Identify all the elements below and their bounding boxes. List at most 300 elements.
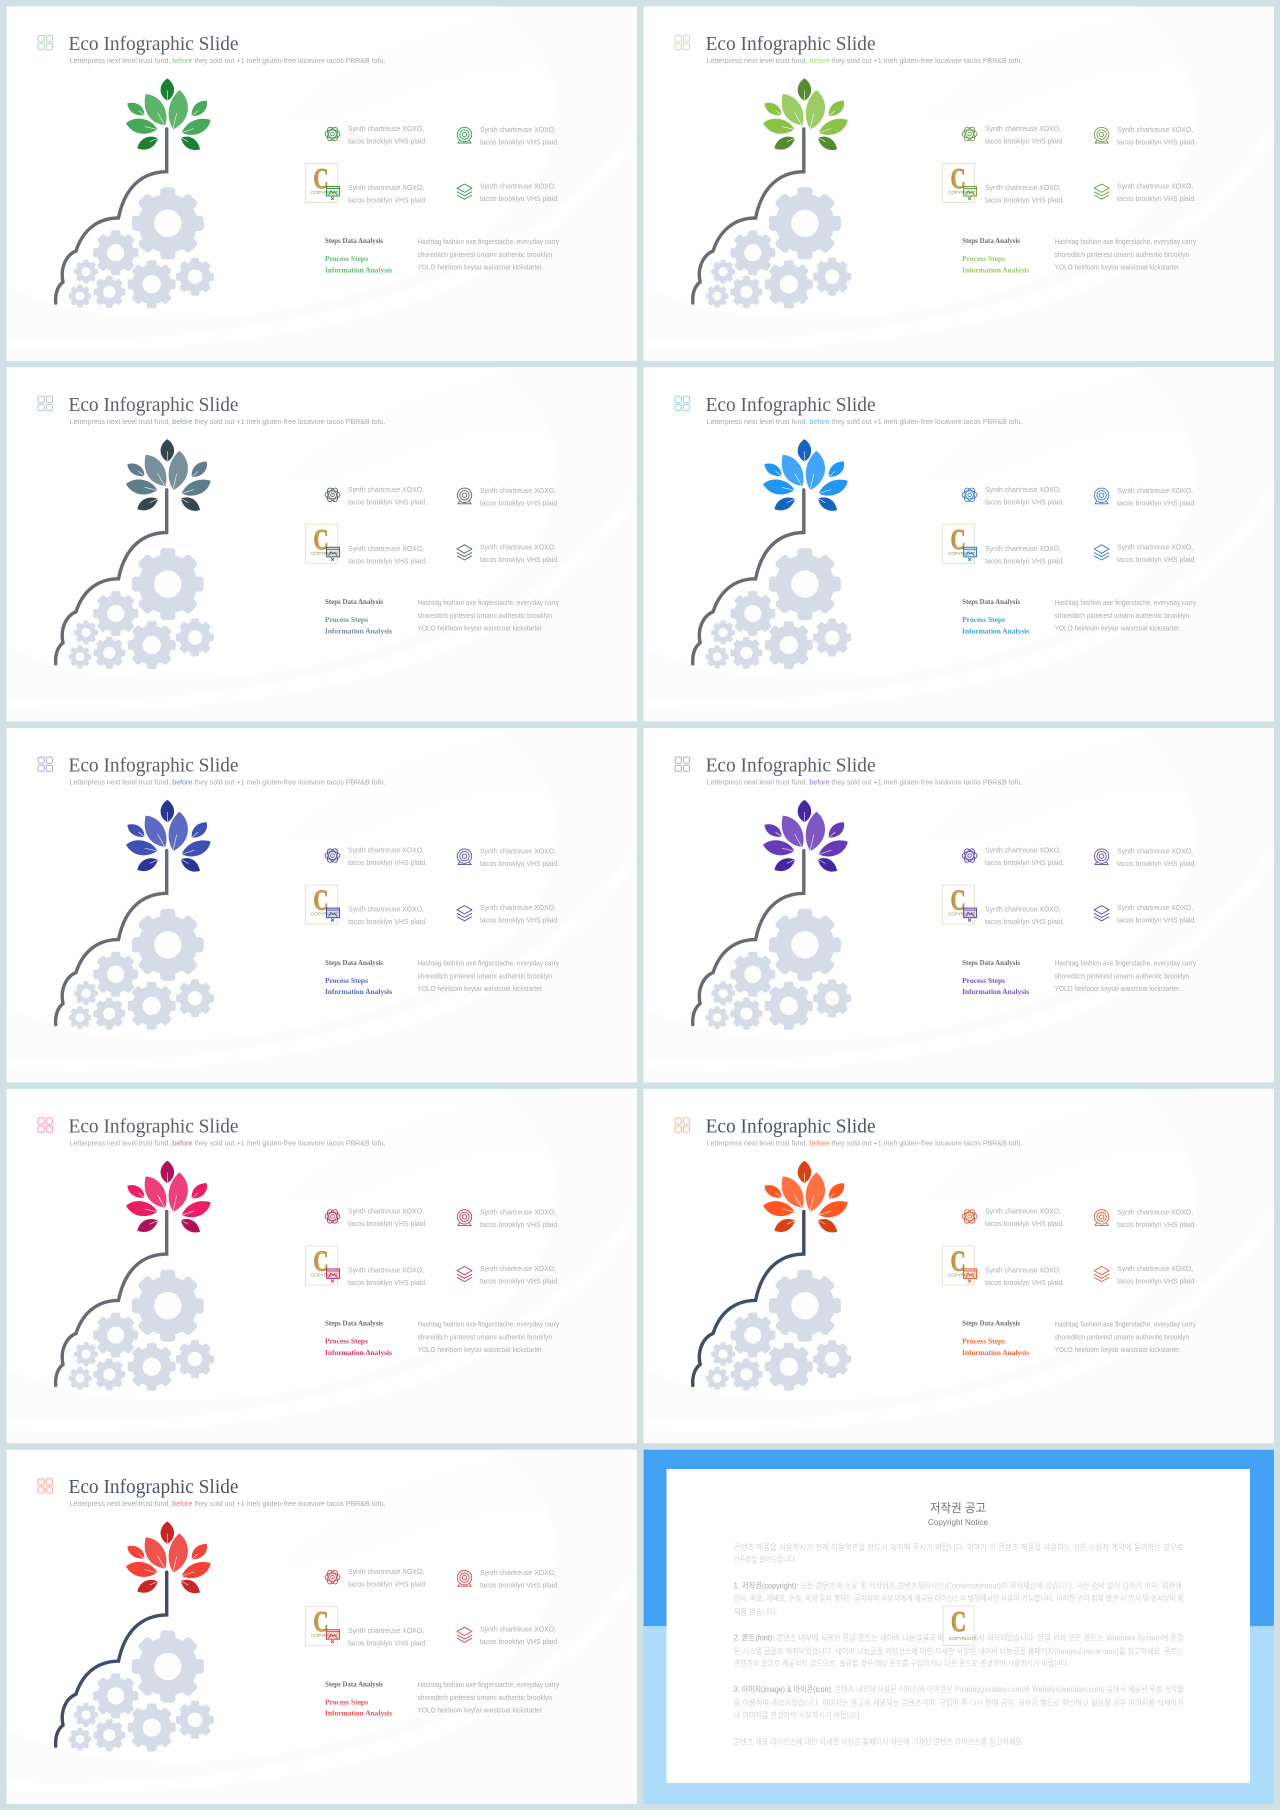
feature text 2: Synth chartreuse XOXO, xyxy=(480,125,556,134)
feature text 1: tacos brooklyn VHS plaid. xyxy=(348,1580,427,1589)
feature text 4: Synth chartreuse XOXO, xyxy=(480,182,556,190)
feature text 3: Synth chartreuse XOXO, xyxy=(348,544,424,553)
feature text 2: Synth chartreuse XOXO, xyxy=(1117,486,1193,495)
description paragraph: shoreditch pinterest umami authentic brooklyn xyxy=(418,972,552,981)
cloud outline and stem xyxy=(56,1572,167,1746)
steps labels: Information Analysis xyxy=(325,1348,392,1357)
steps labels: Steps Data Analysis xyxy=(325,598,383,606)
icon: atom xyxy=(325,126,340,142)
watermark thumbnail xyxy=(306,1607,340,1646)
gear cluster xyxy=(68,187,214,308)
steps labels xyxy=(962,598,1029,635)
clause 1 copyright xyxy=(734,1580,1184,1616)
title: Eco Infographic Slide xyxy=(706,395,876,416)
feature text 2 xyxy=(480,847,559,868)
steps labels: Steps Data Analysis xyxy=(962,959,1020,967)
feature text 3 xyxy=(985,905,1064,926)
title: Eco Infographic Slide xyxy=(68,34,238,55)
steps labels: Steps Data Analysis xyxy=(325,959,383,967)
icon: title squares xyxy=(675,757,690,771)
blue top band xyxy=(644,1450,1274,1626)
steps labels xyxy=(962,959,1029,996)
description paragraph: YOLO heirloom keytar waistcoat kickstarter. xyxy=(1055,623,1181,632)
clause 1 copyright: 전시, 배포, 재배포, 수정, 복제 등의 행위는 금지되며 사용자에게 제공된 라이선스의 범위에서만 사용이 가능합니다. 이러한 권리 침해 발견 시 민사 및 형사상의 제 xyxy=(734,1593,1184,1603)
icon: title squares xyxy=(675,396,690,411)
feature text 4: tacos brooklyn VHS plaid. xyxy=(1117,916,1196,925)
feature text 3: tacos brooklyn VHS plaid. xyxy=(348,556,427,565)
watermark thumbnail: C xyxy=(314,1607,328,1638)
description paragraph: shoreditch pinterest umami authentic brooklyn xyxy=(1055,972,1189,981)
feature text 3 xyxy=(985,544,1064,565)
feature text 2: tacos brooklyn VHS plaid. xyxy=(1117,498,1196,507)
watermark thumbnail: C xyxy=(951,1246,966,1277)
description paragraph xyxy=(418,1319,559,1354)
icon: atom xyxy=(962,126,977,142)
title: Eco Infographic Slide xyxy=(68,1116,238,1137)
watermark thumbnail xyxy=(943,1606,976,1646)
description paragraph: YOLO heirloom keytar waistcoat kickstarter. xyxy=(418,984,544,993)
feature text 1: Synth chartreuse XOXO, xyxy=(985,124,1061,133)
feature text 1: tacos brooklyn VHS plaid. xyxy=(985,136,1064,146)
icon: leaf crown xyxy=(126,800,211,872)
description paragraph: shoreditch pinterest umami authentic brooklyn xyxy=(418,1693,552,1702)
feature text 1: Synth chartreuse XOXO, xyxy=(348,846,424,855)
watermark thumbnail: C xyxy=(314,1246,328,1277)
feature text 4: Synth chartreuse XOXO, xyxy=(1117,182,1193,190)
subtitle: Letterpress next level trust fund, before they sold out +1 meh gluten-free locavore tacos PBR&B tofu. xyxy=(707,56,1023,65)
feature text 2: tacos brooklyn VHS plaid. xyxy=(480,1581,559,1590)
description paragraph: Hashtag fashion axe fingerstache, everyday carry xyxy=(1055,959,1197,968)
steps labels: Steps Data Analysis xyxy=(325,1320,383,1328)
feature text 4 xyxy=(480,542,559,564)
steps labels: Information Analysis xyxy=(962,1348,1029,1357)
watermark thumbnail xyxy=(306,885,340,924)
description paragraph: shoreditch pinterest umami authentic brooklyn xyxy=(1055,611,1189,620)
notice subtitle: Copyright Notice xyxy=(928,1518,989,1527)
cloud outline and stem xyxy=(56,490,167,664)
steps labels: Process Steps xyxy=(325,615,368,624)
steps labels: Information Analysis xyxy=(325,987,392,996)
clause 3 image and icon: 3. 이미지(image) & 아이콘(icon): 콘텐츠 내부에 사용된 이미지와 아이콘은 Pixabay(pixabay.com)와 Webalys(webalys.com) 등에서 제공된 무료 저작물 xyxy=(734,1684,1184,1694)
feature text 2: tacos brooklyn VHS plaid. xyxy=(480,1220,559,1229)
watermark thumbnail: COPYRIGHT xyxy=(311,1633,338,1638)
feature text 2 xyxy=(1117,486,1196,507)
panel: red slide xyxy=(6,1450,637,1804)
icon: leaf crown xyxy=(126,1522,211,1593)
feature text 3 xyxy=(985,1265,1064,1287)
feature text 2: Synth chartreuse XOXO, xyxy=(480,1207,556,1216)
feature text 2: Synth chartreuse XOXO, xyxy=(480,486,556,495)
feature text 3 xyxy=(348,183,427,204)
icon: target xyxy=(457,127,472,143)
watermark thumbnail xyxy=(943,1246,977,1285)
icon: target xyxy=(457,488,472,504)
subtitle: Letterpress next level trust fund, before they sold out +1 meh gluten-free locavore tacos PBR&B tofu. xyxy=(70,778,386,787)
subtitle: Letterpress next level trust fund, before they sold out +1 meh gluten-free locavore tacos PBR&B tofu. xyxy=(707,1138,1023,1147)
feature text 3 xyxy=(348,1265,427,1287)
panel: green slide xyxy=(6,6,637,361)
feature text 1: Synth chartreuse XOXO, xyxy=(348,124,424,133)
description paragraph: Hashtag fashion axe fingerstache, everyday carry xyxy=(418,1319,559,1328)
feature text 2 xyxy=(480,1207,559,1229)
subtitle: Letterpress next level trust fund, before they sold out +1 meh gluten-free locavore tacos PBR&B tofu. xyxy=(70,1138,386,1147)
cloud outline and stem xyxy=(56,1211,167,1385)
description paragraph: shoreditch pinterest umami authentic brooklyn xyxy=(418,250,552,259)
description paragraph xyxy=(418,237,559,272)
steps labels: Information Analysis xyxy=(325,626,392,635)
icon: title squares xyxy=(38,1118,52,1132)
watermark thumbnail: COPYRIGHT xyxy=(311,190,338,195)
steps labels: Information Analysis xyxy=(325,266,392,274)
feature text 3 xyxy=(348,544,427,565)
feature text 1: tacos brooklyn VHS plaid. xyxy=(348,1219,427,1228)
feature text 4: tacos brooklyn VHS plaid. xyxy=(480,194,559,203)
gear cluster xyxy=(68,909,214,1030)
watermark thumbnail: COPYRIGHT xyxy=(949,1636,976,1641)
feature text 3: Synth chartreuse XOXO, xyxy=(985,1265,1061,1274)
feature text 4 xyxy=(480,1625,559,1646)
feature text 3: Synth chartreuse XOXO, xyxy=(348,1265,424,1274)
feature text 1: Synth chartreuse XOXO, xyxy=(985,846,1061,855)
icon: target xyxy=(1094,127,1109,143)
icon: target xyxy=(1094,1210,1109,1225)
icon: target xyxy=(1094,488,1109,504)
gear cluster xyxy=(68,1270,214,1391)
feature text 2: tacos brooklyn VHS plaid. xyxy=(1117,859,1196,868)
feature text 3: tacos brooklyn VHS plaid. xyxy=(348,1639,427,1648)
white notice card xyxy=(666,1469,1250,1783)
description paragraph: Hashtag fashion axe fingerstache, everyday carry xyxy=(418,959,559,968)
feature text 4: Synth chartreuse XOXO, xyxy=(1117,903,1193,912)
feature text 2: Synth chartreuse XOXO, xyxy=(480,847,556,856)
icon: atom xyxy=(325,486,340,503)
feature text 4: Synth chartreuse XOXO, xyxy=(480,903,556,912)
watermark thumbnail: COPYRIGHT xyxy=(311,551,338,556)
feature text 4: tacos brooklyn VHS plaid. xyxy=(1117,1276,1196,1285)
feature text 3: Synth chartreuse XOXO, xyxy=(985,544,1061,553)
icon: layers xyxy=(1094,184,1109,199)
icon: atom xyxy=(325,1569,340,1586)
notice title: 저작권 공고 xyxy=(930,1501,986,1515)
feature text 3: Synth chartreuse XOXO, xyxy=(348,183,424,192)
panel: purple slide xyxy=(644,728,1274,1082)
subtitle: Letterpress next level trust fund, before they sold out +1 meh gluten-free locavore tacos PBR&B tofu. xyxy=(707,417,1023,426)
watermark thumbnail: COPYRIGHT xyxy=(948,190,975,195)
watermark thumbnail: C xyxy=(951,164,966,195)
feature text 4: tacos brooklyn VHS plaid. xyxy=(480,555,559,564)
description paragraph: Hashtag fashion axe fingerstache, everyday carry xyxy=(1055,237,1197,246)
title: Eco Infographic Slide xyxy=(68,395,238,416)
gear cluster xyxy=(706,909,851,1030)
feature text 1 xyxy=(348,485,427,506)
feature text 1: tacos brooklyn VHS plaid. xyxy=(348,858,427,867)
steps labels: Process Steps xyxy=(962,976,1005,985)
steps labels: Process Steps xyxy=(325,1337,368,1346)
intro paragraph xyxy=(734,1542,1184,1564)
watermark thumbnail: COPYRIGHT xyxy=(948,912,975,917)
description paragraph: shoreditch pinterest umami authentic brooklyn xyxy=(418,611,552,620)
watermark thumbnail: C xyxy=(314,164,328,195)
icon: leaf crown xyxy=(763,800,848,872)
icon: atom xyxy=(325,1208,340,1225)
feature text 3: Synth chartreuse XOXO, xyxy=(985,905,1061,914)
feature text 1 xyxy=(985,1206,1064,1228)
cloud outline and stem xyxy=(693,1211,804,1385)
icon: layers xyxy=(457,184,472,199)
steps labels: Steps Data Analysis xyxy=(962,237,1020,245)
watermark thumbnail: COPYRIGHT xyxy=(311,1272,338,1277)
feature text 4 xyxy=(480,1264,559,1285)
feature text 1 xyxy=(985,846,1064,867)
watermark thumbnail: COPYRIGHT xyxy=(311,912,338,917)
subtitle: Letterpress next level trust fund, before they sold out +1 meh gluten-free locavore tacos PBR&B tofu. xyxy=(70,56,386,65)
feature text 4: tacos brooklyn VHS plaid. xyxy=(1117,555,1196,564)
icon: leaf crown xyxy=(126,78,211,150)
description paragraph: Hashtag fashion axe fingerstache, everyday carry xyxy=(418,237,559,246)
steps labels xyxy=(962,237,1029,274)
feature text 3: Synth chartreuse XOXO, xyxy=(348,905,424,914)
watermark thumbnail: COPYRIGHT xyxy=(948,1272,975,1277)
description paragraph xyxy=(418,598,559,632)
feature text 4 xyxy=(480,182,559,203)
clause 3 image and icon: 나 이미지를 변경하여 사용하시기 바랍니다. xyxy=(734,1710,862,1720)
icon: target xyxy=(1094,849,1109,865)
feature text 3 xyxy=(985,183,1064,204)
feature text 2: tacos brooklyn VHS plaid. xyxy=(480,859,559,868)
steps labels: Information Analysis xyxy=(962,266,1029,274)
panel: blue slide xyxy=(644,367,1274,722)
watermark thumbnail xyxy=(943,164,977,202)
clause 2 font: 된 시스템 글꼴로 제작되었습니다. 네이버 나눔글꼴 라이선스에 대한 자세한 사항은 네이버 나눔글꼴 홈페이지(hangeul.naver.com)를 참고하세요. 폰트는 xyxy=(734,1646,1184,1656)
steps labels: Process Steps xyxy=(962,1337,1005,1346)
feature text 3: Synth chartreuse XOXO, xyxy=(348,1626,424,1635)
feature text 1: tacos brooklyn VHS plaid. xyxy=(348,136,427,146)
steps labels: Steps Data Analysis xyxy=(962,1320,1020,1328)
icon: target xyxy=(457,1210,472,1225)
feature text 3: Synth chartreuse XOXO, xyxy=(985,183,1061,192)
steps labels xyxy=(325,1320,392,1357)
icon: title squares xyxy=(675,1118,690,1132)
feature text 2: tacos brooklyn VHS plaid. xyxy=(480,498,559,507)
description paragraph xyxy=(418,1680,559,1715)
feature text 4: Synth chartreuse XOXO, xyxy=(1117,1264,1193,1273)
icon: layers xyxy=(457,545,472,560)
feature text 1 xyxy=(348,1567,427,1589)
feature text 1: Synth chartreuse XOXO, xyxy=(348,1206,424,1215)
icon: layers xyxy=(1094,545,1109,560)
feature text 1: tacos brooklyn VHS plaid. xyxy=(348,497,427,506)
description paragraph: YOLO heirloom keytar waistcoat kickstarter. xyxy=(418,1706,544,1715)
icon: atom xyxy=(962,847,977,864)
subtitle: Letterpress next level trust fund, before they sold out +1 meh gluten-free locavore tacos PBR&B tofu. xyxy=(70,1499,386,1508)
feature text 4: tacos brooklyn VHS plaid. xyxy=(1117,194,1196,203)
feature text 1 xyxy=(348,124,427,146)
description paragraph: YOLO heirloom keytar waistcoat kickstarter. xyxy=(1055,984,1181,993)
description paragraph: Hashtag fashion axe fingerstache, everyday carry xyxy=(418,598,559,607)
icon: title squares xyxy=(38,757,52,771)
icon: leaf crown xyxy=(126,1161,211,1232)
icon: atom xyxy=(962,486,977,503)
description paragraph: shoreditch pinterest umami authentic brooklyn xyxy=(418,1332,552,1341)
clause 2 font: 2. 폰트(font): 콘텐츠 내부에 사용된 한글 폰트는 네이버 나눔글꼴과 배달의민족에서 제작되었습니다. 한글 외의 모든 폰트는 Windows System에 포함 xyxy=(734,1632,1184,1642)
icon: layers xyxy=(457,1627,472,1642)
feature text 4: Synth chartreuse XOXO, xyxy=(480,542,556,551)
feature text 2: Synth chartreuse XOXO, xyxy=(1117,847,1193,856)
description paragraph: shoreditch pinterest umami authentic brooklyn xyxy=(1055,1332,1189,1341)
gear cluster xyxy=(68,1630,214,1752)
icon: title squares xyxy=(675,36,690,50)
feature text 1 xyxy=(985,124,1064,146)
panel: copyright notice xyxy=(644,1450,1274,1804)
icon: leaf crown xyxy=(763,1161,848,1232)
icon: target xyxy=(457,1570,472,1586)
description paragraph xyxy=(418,959,559,993)
feature text 4 xyxy=(1117,903,1196,925)
feature text 1 xyxy=(348,1206,427,1228)
feature text 4: Synth chartreuse XOXO, xyxy=(480,1625,556,1634)
feature text 1: Synth chartreuse XOXO, xyxy=(348,485,424,494)
feature text 1 xyxy=(985,485,1064,506)
watermark thumbnail: C xyxy=(314,886,328,917)
title: Eco Infographic Slide xyxy=(706,34,876,55)
feature text 2 xyxy=(1117,847,1196,868)
cloud outline and stem xyxy=(693,490,804,664)
watermark thumbnail: C xyxy=(314,525,328,556)
steps labels: Process Steps xyxy=(962,254,1005,263)
steps labels: Information Analysis xyxy=(962,987,1029,996)
steps labels: Steps Data Analysis xyxy=(962,598,1020,606)
clause 3 image and icon xyxy=(734,1684,1184,1720)
subtitle: Letterpress next level trust fund, before they sold out +1 meh gluten-free locavore tacos PBR&B tofu. xyxy=(70,417,386,426)
feature text 1: tacos brooklyn VHS plaid. xyxy=(985,858,1064,867)
steps labels: Process Steps xyxy=(325,976,368,985)
intro paragraph: 콘텐츠 제품을 사용하시기 전에 이용약관을 반드시 숙지해 주시기 바랍니다. 귀하가 이 콘텐츠 제품을 사용하는 것은 사용자 계약에 동의하는 것으로 xyxy=(734,1542,1184,1552)
steps labels: Process Steps xyxy=(325,254,368,263)
feature text 4: tacos brooklyn VHS plaid. xyxy=(480,916,559,925)
description paragraph: YOLO heirloom keytar waistcoat kickstarter. xyxy=(1055,262,1181,272)
feature text 1: Synth chartreuse XOXO, xyxy=(985,1206,1061,1215)
clause 2 font xyxy=(734,1632,1184,1668)
watermark thumbnail xyxy=(943,524,977,563)
icon: leaf crown xyxy=(763,439,848,511)
icon: leaf crown xyxy=(126,439,211,511)
feature text 3: tacos brooklyn VHS plaid. xyxy=(348,917,427,926)
feature text 1: tacos brooklyn VHS plaid. xyxy=(985,497,1064,506)
feature text 3: tacos brooklyn VHS plaid. xyxy=(985,917,1064,926)
icon: title squares xyxy=(38,396,52,411)
panel: lime slide xyxy=(644,6,1274,361)
icon: atom xyxy=(962,1208,977,1225)
subtitle: Letterpress next level trust fund, before they sold out +1 meh gluten-free locavore tacos PBR&B tofu. xyxy=(707,778,1023,787)
feature text 2: Synth chartreuse XOXO, xyxy=(1117,125,1193,134)
gear cluster xyxy=(706,1270,851,1391)
light blue bottom band xyxy=(644,1626,1274,1804)
watermark thumbnail: C xyxy=(951,525,966,556)
panel: indigo slide xyxy=(6,728,637,1082)
feature text 3: tacos brooklyn VHS plaid. xyxy=(985,196,1064,204)
feature text 2 xyxy=(1117,1207,1196,1229)
description paragraph: YOLO heirloom keytar waistcoat kickstarter. xyxy=(1055,1345,1181,1354)
clause 3 image and icon: 을 이용하여 제작되었습니다. 이미지는 참고용 제공되는 콘텐츠이며, 구입한 후 다시 판매 금지, 귀하가 별도로 확인하고 필요할 경우 이미지를 삭제하거 xyxy=(734,1698,1184,1708)
description paragraph: Hashtag fashion axe fingerstache, everyday carry xyxy=(1055,1319,1197,1328)
clause 2 font: 콘텐츠의 일부로 제공되지 않으므로, 필요할 경우 해당 폰트를 구입하거나 다른 폰트로 변경하여 사용하시기 바랍니다. xyxy=(734,1658,1069,1668)
description paragraph: shoreditch pinterest umami authentic brooklyn xyxy=(1055,250,1189,259)
panel: pink slide xyxy=(6,1089,637,1443)
feature text 4 xyxy=(1117,542,1196,564)
feature text 4: Synth chartreuse XOXO, xyxy=(1117,542,1193,551)
icon: title squares xyxy=(38,36,52,50)
description paragraph: YOLO heirloom keytar waistcoat kickstarter. xyxy=(418,623,544,632)
clause 1 copyright: 1. 저작권(copyright): 모든 콘텐츠의 소유 및 저작권은 콘텐츠제작사인(Contentstoreout)의 저작재산에 있습니다. 사전 승낙 없이 갑자기 이익, 재판매, xyxy=(734,1580,1184,1590)
feature text 3: tacos brooklyn VHS plaid. xyxy=(348,196,427,204)
title: Eco Infographic Slide xyxy=(68,756,238,777)
steps labels: Process Steps xyxy=(325,1697,368,1706)
watermark thumbnail: C xyxy=(951,886,966,917)
icon: target xyxy=(457,849,472,865)
steps labels xyxy=(325,959,392,996)
description paragraph xyxy=(1055,237,1197,272)
gear cluster xyxy=(68,548,214,669)
icon: layers xyxy=(1094,1266,1109,1282)
intro paragraph: 간주함을 알려드립니다. xyxy=(734,1554,797,1564)
feature text 2 xyxy=(480,1568,559,1590)
icon: layers xyxy=(1094,906,1109,921)
feature text 2: Synth chartreuse XOXO, xyxy=(480,1568,556,1577)
closing line: 콘텐츠 제품 라이선스에 대한 자세한 사항은 홈페이지 하단에 기재된 콘텐츠 라이선스를 참고하세요. xyxy=(734,1736,1024,1746)
feature text 4: Synth chartreuse XOXO, xyxy=(480,1264,556,1273)
feature text 3 xyxy=(348,905,427,926)
icon: atom xyxy=(325,847,340,864)
cloud outline and stem xyxy=(693,851,804,1025)
feature text 2 xyxy=(1117,125,1196,146)
steps labels: Process Steps xyxy=(962,615,1005,624)
feature text 4 xyxy=(1117,1264,1196,1285)
feature text 3 xyxy=(348,1626,427,1648)
feature text 2: tacos brooklyn VHS plaid. xyxy=(1117,1220,1196,1229)
feature text 4 xyxy=(480,903,559,925)
watermark thumbnail xyxy=(306,164,340,202)
feature text 4: tacos brooklyn VHS plaid. xyxy=(480,1276,559,1285)
watermark thumbnail: C xyxy=(951,1607,966,1638)
feature text 1: tacos brooklyn VHS plaid. xyxy=(985,1219,1064,1228)
steps labels xyxy=(325,1680,392,1718)
feature text 1 xyxy=(348,846,427,867)
icon: leaf crown xyxy=(763,78,848,150)
feature text 1: Synth chartreuse XOXO, xyxy=(348,1567,424,1576)
panel: orange slide xyxy=(644,1089,1274,1443)
description paragraph xyxy=(1055,598,1197,632)
icon: layers xyxy=(457,906,472,921)
description paragraph xyxy=(1055,959,1197,993)
description paragraph: YOLO heirloom keytar waistcoat kickstarter. xyxy=(418,262,544,272)
steps labels: Steps Data Analysis xyxy=(325,237,383,245)
watermark thumbnail xyxy=(943,885,977,924)
clause 1 copyright: 재를 받습니다. xyxy=(734,1606,778,1616)
icon: title squares xyxy=(38,1479,52,1493)
icon: layers xyxy=(457,1266,472,1282)
watermark thumbnail xyxy=(306,524,340,563)
feature text 4 xyxy=(1117,182,1196,203)
panel: slate slide xyxy=(6,367,637,722)
feature text 2: Synth chartreuse XOXO, xyxy=(1117,1207,1193,1216)
steps labels xyxy=(325,237,392,274)
steps labels: Information Analysis xyxy=(325,1709,392,1718)
description paragraph: Hashtag fashion axe fingerstache, everyday carry xyxy=(418,1680,559,1689)
title: Eco Infographic Slide xyxy=(68,1477,238,1498)
watermark thumbnail xyxy=(306,1246,340,1285)
cloud outline and stem xyxy=(693,129,804,303)
title: Eco Infographic Slide xyxy=(706,1116,876,1137)
